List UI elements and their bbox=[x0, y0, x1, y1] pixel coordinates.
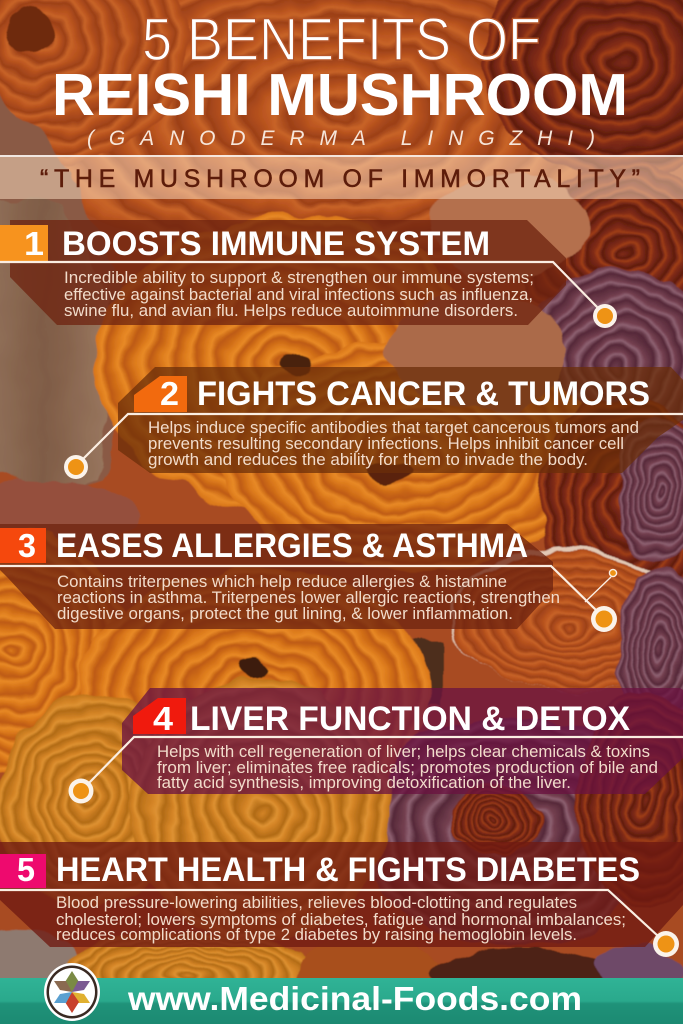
body text 2: prevents resulting secondary infections. Helps inhibit cancer cell bbox=[148, 435, 624, 453]
body text 5: Blood pressure-lowering abilities, relieves blood-clotting and regulates bbox=[56, 894, 577, 912]
panel 5: heart health and fights diabetes bbox=[0, 842, 683, 957]
body text 3 bbox=[57, 573, 560, 623]
body text 2: growth and reduces the ability for them to invade the body. bbox=[148, 451, 588, 469]
body text 4: Helps with cell regeneration of liver; helps clear chemicals & toxins bbox=[157, 743, 650, 761]
connector 3 bbox=[0, 566, 597, 611]
heading 4: LIVER FUNCTION & DETOX bbox=[190, 700, 630, 738]
body text 3: digestive organs, protect the gut lining, & lower inflammation. bbox=[57, 605, 513, 623]
number badge 1: 1 bbox=[24, 225, 44, 262]
connector 4 bbox=[88, 737, 683, 784]
number badge 5: 5 bbox=[17, 851, 35, 888]
body text 1: swine flu, and avian flu. Helps reduce autoimmune disorders. bbox=[64, 302, 518, 320]
panel 4: liver function and detox bbox=[68, 688, 683, 804]
body text 2 bbox=[148, 419, 639, 469]
connector 1 bbox=[0, 262, 598, 308]
heading 5: HEART HEALTH & FIGHTS DIABETES bbox=[56, 851, 640, 889]
marker 2 bbox=[64, 455, 88, 479]
small branch marker bbox=[585, 569, 617, 602]
number badge 2 bbox=[134, 375, 187, 412]
panel 2: fights cancer and tumors bbox=[64, 367, 683, 479]
number badge 4 bbox=[133, 698, 186, 737]
body text 5 bbox=[56, 894, 626, 944]
number badge 1 bbox=[0, 225, 48, 262]
title: reishi mushroom: REISHI MUSHROOM bbox=[52, 62, 628, 128]
tagline text: “THE MUSHROOM OF IMMORTALITY” bbox=[40, 165, 640, 193]
subtitle: latin name: (GANODERMA LINGZHI) bbox=[87, 127, 595, 150]
number badge 3: 3 bbox=[18, 527, 36, 564]
body text 5: reduces complications of type 2 diabetes by raising hemoglobin levels. bbox=[56, 926, 577, 944]
footer bar bbox=[0, 978, 683, 1024]
marker 1 bbox=[593, 304, 617, 328]
body text 4: from liver; eliminates free radicals; promotes production of bile and bbox=[157, 759, 658, 777]
connector 2 bbox=[82, 414, 683, 460]
tagline band bbox=[0, 155, 683, 199]
heading 2: FIGHTS CANCER & TUMORS bbox=[197, 375, 650, 413]
body text 2: Helps induce specific antibodies that target cancerous tumors and bbox=[148, 419, 639, 437]
body text 3: reactions in asthma. Triterpenes lower allergic reactions, strengthen bbox=[57, 589, 560, 607]
number badge 3 bbox=[0, 527, 46, 564]
panel 3: eases allergies and asthma bbox=[0, 524, 617, 632]
marker 4 bbox=[68, 778, 94, 804]
body text 4 bbox=[157, 743, 658, 792]
title: 5 benefits of: 5 BENEFITS OF bbox=[142, 6, 541, 73]
logo bbox=[44, 963, 100, 1021]
body text 3: Contains triterpenes which help reduce allergies & histamine bbox=[57, 573, 507, 591]
heading 3: EASES ALLERGIES & ASTHMA bbox=[56, 527, 528, 565]
panel 1: boosts immune system bbox=[0, 220, 617, 328]
number badge 4: 4 bbox=[153, 700, 174, 737]
website url: www.Medicinal-Foods.com bbox=[127, 980, 582, 1017]
body text 5: cholesterol; lowers symptoms of diabetes, fatigue and hormonal imbalances; bbox=[56, 911, 626, 929]
body text 1: Incredible ability to support & strengthen our immune systems; bbox=[64, 269, 534, 287]
body text 1: effective against bacterial and viral infections such as influenza, bbox=[64, 286, 533, 304]
connector 5 bbox=[0, 890, 658, 936]
body text 1 bbox=[64, 269, 534, 320]
number badge 2: 2 bbox=[160, 375, 179, 412]
marker 5 bbox=[653, 931, 679, 957]
marker 3 bbox=[591, 606, 617, 632]
heading 1: BOOSTS IMMUNE SYSTEM bbox=[62, 225, 490, 263]
body text 4: fatty acid synthesis, improving detoxification of the liver. bbox=[157, 774, 571, 792]
number badge 5 bbox=[0, 851, 46, 888]
